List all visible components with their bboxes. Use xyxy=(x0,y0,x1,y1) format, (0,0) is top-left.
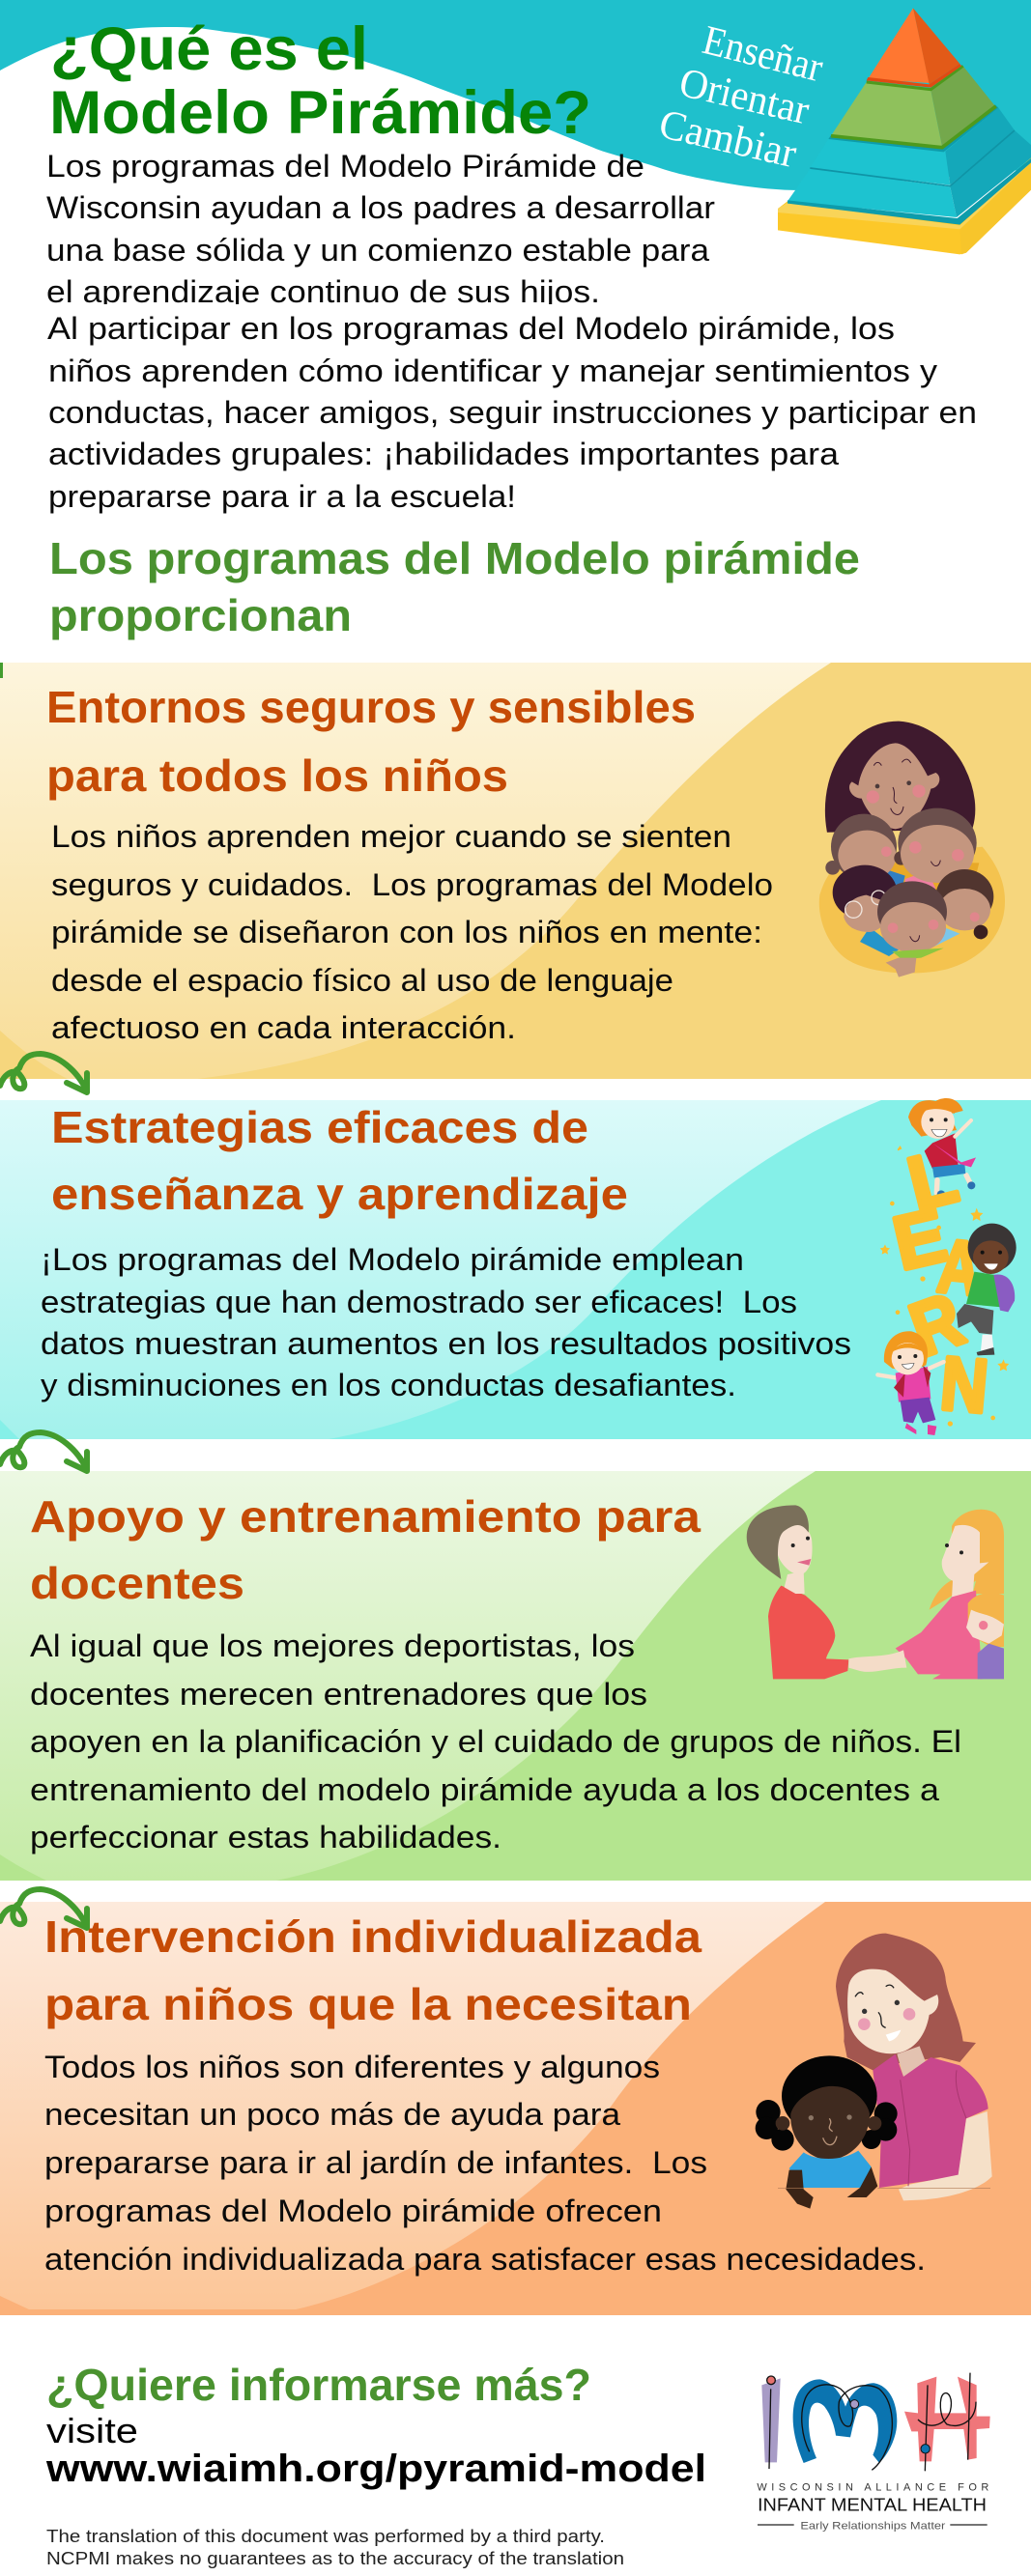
arrow 2 xyxy=(0,1432,87,1471)
title: Modelo Pirámide? xyxy=(49,79,591,147)
body text xyxy=(41,1242,851,1402)
body text: seguros y cuidados. Los programas del Modelo xyxy=(51,867,773,902)
illustration: children climbing LEARN letters xyxy=(877,1098,1017,1435)
translation disclaimer: The translation of this document was performed by a third party. xyxy=(46,2527,605,2546)
logo: Wisconsin Alliance for Infant Mental Health: INFANT MENTAL HEALTH xyxy=(758,2494,987,2514)
body text: afectuoso en cada interacción. xyxy=(51,1010,516,1045)
footer call to action xyxy=(45,2360,706,2490)
wave labels: Enseñar Orientar Cambiar: Enseñar xyxy=(699,17,827,91)
body text: ¡Los programas del Modelo pirámide emplean xyxy=(41,1242,744,1277)
arrow 1 xyxy=(0,1054,87,1092)
body text: Al igual que los mejores deportistas, los xyxy=(30,1628,635,1663)
section heading xyxy=(49,533,860,640)
illustration: children climbing LEARN letters: E xyxy=(886,1192,954,1287)
heading: para niños que la necesitan xyxy=(44,1979,692,2029)
body text: entrenamiento del modelo pirámide ayuda a los docentes a xyxy=(30,1772,939,1807)
footer call to action: ¿Quiere informarse más? xyxy=(46,2360,591,2410)
title: ¿Qué es el xyxy=(50,15,368,83)
intro paragraph 1: Los programas del Modelo Pirámide de xyxy=(46,149,644,184)
arrow 3 xyxy=(0,1889,87,1928)
intro paragraph 1: Wisconsin ayudan a los padres a desarrollar xyxy=(46,190,715,225)
wave labels: Enseñar Orientar Cambiar xyxy=(655,17,827,177)
wave labels: Enseñar Orientar Cambiar: Orientar xyxy=(675,60,814,133)
heading: Estrategias eficaces de xyxy=(51,1102,588,1152)
translation disclaimer xyxy=(46,2527,624,2568)
body text: Los niños aprenden mejor cuando se sienten xyxy=(51,819,731,854)
body text: datos muestran aumentos en los resultados positivos xyxy=(41,1326,851,1361)
wave labels: Enseñar Orientar Cambiar: Cambiar xyxy=(655,101,801,177)
footer call to action: visite xyxy=(46,2411,138,2450)
body text: Todos los niños son diferentes y algunos xyxy=(44,2050,660,2084)
translation disclaimer: NCPMI makes no guarantees as to the accuracy of the translation xyxy=(46,2549,624,2568)
heading xyxy=(44,1911,702,2029)
icon: pyramid xyxy=(778,8,1031,254)
body text: apoyen en la planificación y el cuidado de grupos de niños. El xyxy=(30,1724,961,1759)
logo: Wisconsin Alliance for Infant Mental Health xyxy=(757,2373,990,2532)
title xyxy=(49,15,591,147)
body text: programas del Modelo pirámide ofrecen xyxy=(44,2194,662,2228)
panel: apoyo y entrenamiento xyxy=(0,1471,1031,1881)
body text xyxy=(44,2050,926,2277)
body text xyxy=(30,1628,961,1854)
illustration: mother and child xyxy=(756,1934,992,2209)
body text: docentes merecen entrenadores que los xyxy=(30,1677,647,1712)
intro paragraph 2 xyxy=(47,311,977,514)
heading xyxy=(30,1491,701,1608)
header teal wave xyxy=(0,0,1031,190)
footer call to action: www.wiaimh.org/pyramid-model xyxy=(45,2448,706,2490)
illustration: children climbing LEARN letters: R xyxy=(900,1276,974,1373)
illustration: mother hugging children xyxy=(819,722,1005,977)
heading: enseñanza y aprendizaje xyxy=(51,1169,628,1219)
intro paragraph 2: Al participar en los programas del Modelo pirámide, los xyxy=(47,311,895,346)
intro paragraph 1: el aprendizaje continuo de sus hijos. xyxy=(46,274,600,309)
intro paragraph 1 xyxy=(46,149,715,309)
panel: estrategias eficaces xyxy=(0,1098,1031,1439)
section heading: proporcionan xyxy=(49,590,352,640)
body text xyxy=(51,819,773,1045)
body text: atención individualizada para satisfacer esas necesidades. xyxy=(44,2242,926,2277)
illustration: children climbing LEARN letters: L xyxy=(900,1133,965,1227)
heading: para todos los niños xyxy=(46,750,508,801)
logo: Wisconsin Alliance for Infant Mental Health: WISCONSIN ALLIANCE FOR xyxy=(757,2481,988,2493)
panel background green xyxy=(0,1471,1031,1881)
body text: pirámide se diseñaron con los niños en mente: xyxy=(51,915,762,949)
panel: intervención individualizada xyxy=(0,1902,1031,2315)
body text: prepararse para ir al jardín de infantes. Los xyxy=(44,2145,707,2180)
panel background orange xyxy=(0,1902,1031,2315)
heading xyxy=(51,1102,628,1219)
body text: perfeccionar estas habilidades. xyxy=(30,1820,501,1854)
body text: y disminuciones en los conductas desafiantes. xyxy=(41,1368,736,1402)
intro paragraph 2: conductas, hacer amigos, seguir instrucciones y participar en xyxy=(48,395,977,430)
body text: necesitan un poco más de ayuda para xyxy=(44,2097,620,2132)
intro paragraph 2: prepararse para ir a la escuela! xyxy=(48,479,516,514)
body text: estrategias que han demostrado ser eficaces! Los xyxy=(41,1285,797,1319)
intro paragraph 2: actividades grupales: ¡habilidades importantes para xyxy=(48,437,839,471)
illustration: children climbing LEARN letters: N xyxy=(937,1341,991,1429)
illustration: teacher and coach shaking hands xyxy=(747,1505,1004,1679)
panel: entornos seguros xyxy=(0,663,1031,1079)
heading xyxy=(46,682,696,801)
panel background yellow xyxy=(0,663,1031,1079)
heading: Intervención individualizada xyxy=(44,1911,702,1962)
body text: desde el espacio físico al uso de lenguaje xyxy=(51,963,673,998)
panel background cyan xyxy=(0,1100,1031,1439)
heading: Apoyo y entrenamiento para xyxy=(30,1491,701,1542)
heading: Entornos seguros y sensibles xyxy=(46,682,696,732)
section heading: Los programas del Modelo pirámide xyxy=(49,533,860,583)
heading: docentes xyxy=(30,1558,244,1608)
illustration: children climbing LEARN letters: A xyxy=(934,1223,985,1312)
logo: Wisconsin Alliance for Infant Mental Health: Early Relationships Matter xyxy=(800,2520,946,2532)
intro paragraph 2: niños aprenden cómo identificar y manejar sentimientos y xyxy=(48,354,937,388)
intro paragraph 1: una base sólida y un comienzo estable para xyxy=(46,233,709,268)
